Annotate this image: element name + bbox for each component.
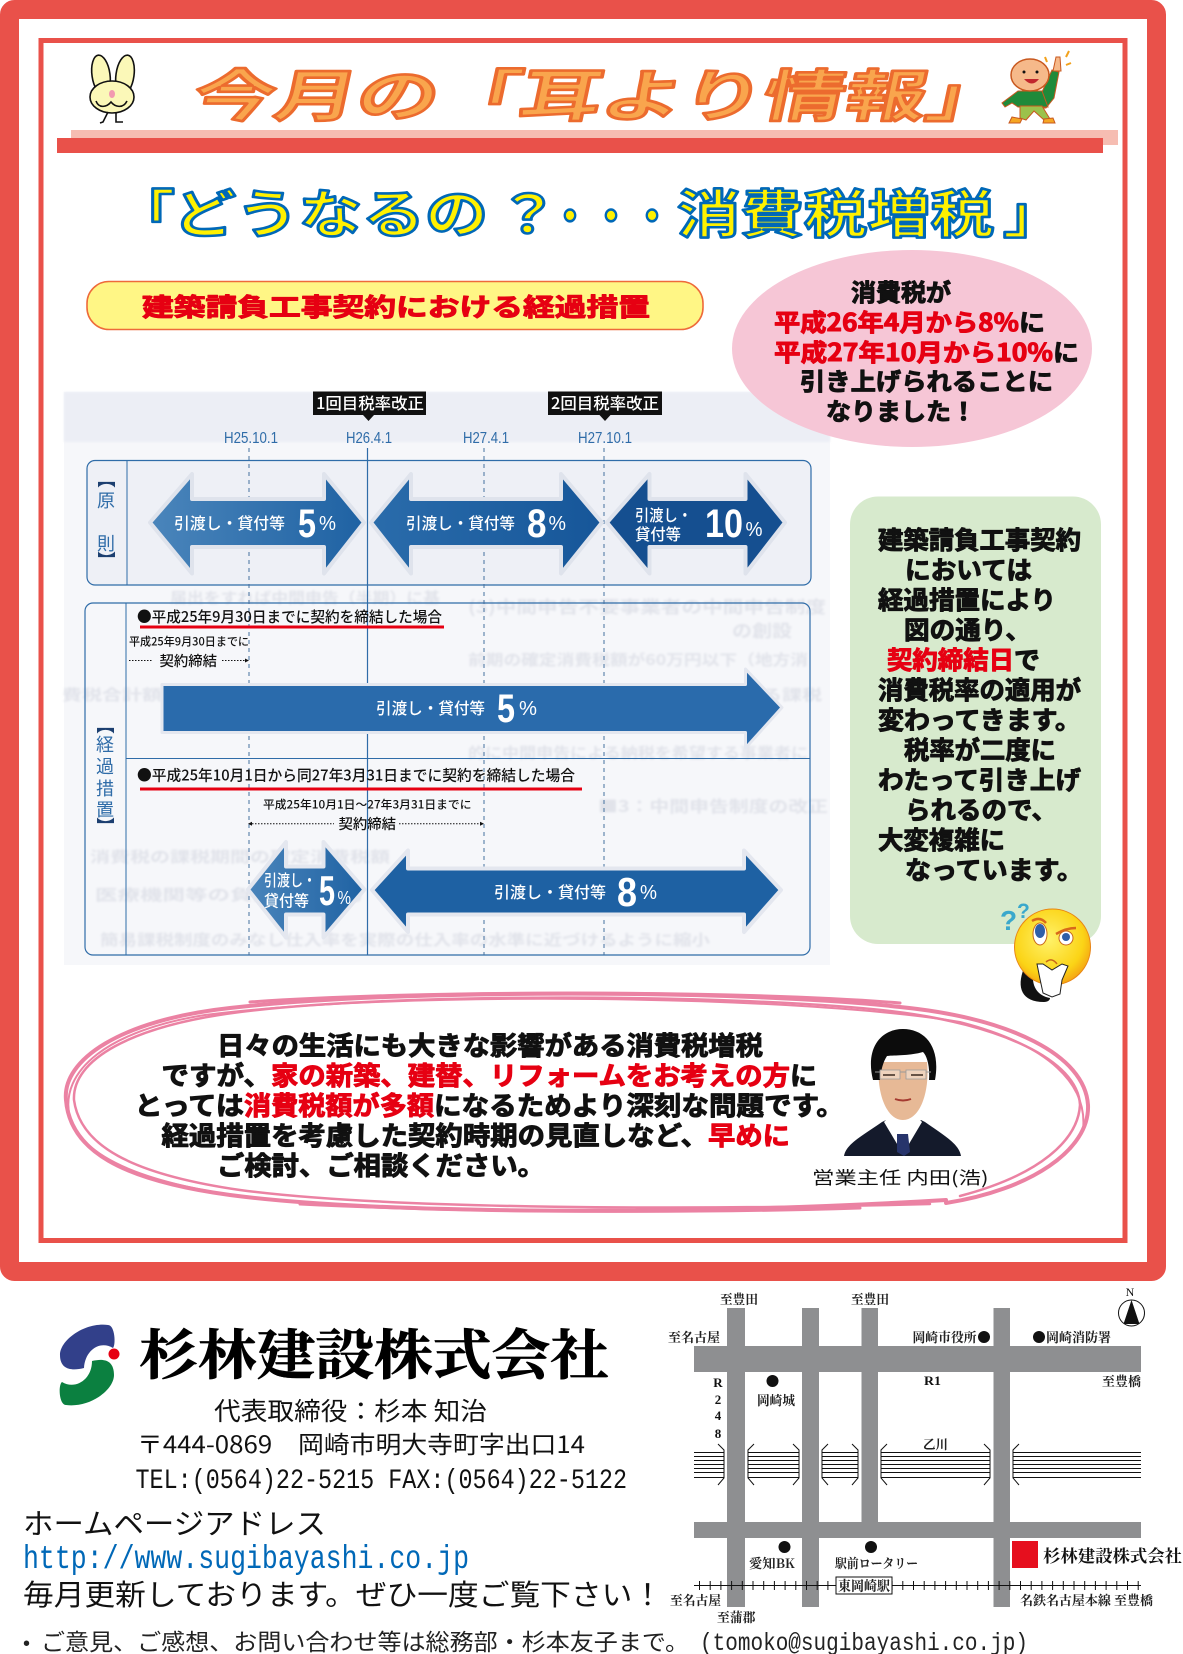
- map labels: 至豊田: [851, 1289, 889, 1308]
- red title rule: [57, 138, 1103, 153]
- message text: 消費税額が多額: [244, 1086, 434, 1123]
- map labels: 至豊橋: [1102, 1371, 1141, 1390]
- arrow: 10 percent principle: 貸付等: [635, 521, 681, 545]
- message text: 経過措置を考慮した契約時期の見直しなど、: [162, 1116, 708, 1153]
- label: transitional: 過: [96, 757, 114, 777]
- arrow: 5 percent transitional short: %: [338, 888, 351, 908]
- message text: 早めに: [708, 1116, 790, 1153]
- timeline dates: [224, 430, 632, 447]
- panel: green explanation: 消費税率の適用が: [878, 671, 1081, 707]
- subtitle: [113, 173, 1065, 248]
- arrow: 8 percent transitional: 引渡し・貸付等: [494, 879, 606, 903]
- portrait: sales manager: [844, 1029, 961, 1156]
- timeline dates: H25.10.1: [224, 430, 278, 447]
- chart scan background: ■3：中間申告制度の改正: [598, 793, 828, 817]
- message text: ご検討、ご相談ください。: [217, 1146, 545, 1183]
- case 2 contract note: [248, 796, 484, 834]
- panel: green explanation: 経過措置により: [878, 581, 1056, 617]
- icon: pointing man: [1002, 51, 1071, 123]
- panel: green explanation: 図の通り、: [904, 611, 1031, 647]
- chart scan background: 届出をすれば中間申告（半期）に基: [170, 587, 440, 608]
- map labels: 8: [715, 1426, 722, 1441]
- chart scan background: 消費税の課税期間の確定消費税額: [90, 846, 390, 867]
- label: transitional: 【: [94, 716, 114, 734]
- map labels: 乙川: [923, 1434, 948, 1453]
- arrow: 8 percent principle: 引渡し・貸付等: [406, 510, 515, 534]
- subtitle: 「: [113, 173, 175, 248]
- callout: pink tax summary: 平成26年4月から8%: [774, 303, 1019, 338]
- roads: [694, 1308, 1141, 1607]
- box: principle row: [87, 460, 811, 585]
- subtitle: ？: [497, 173, 559, 248]
- outer red frame: [10, 10, 1156, 1272]
- portrait caption: 営業主任 内田(浩): [812, 1165, 988, 1190]
- homepage url: http://www.sugibayashi.co.jp: [23, 1541, 469, 1578]
- arrow: 5 percent principle: [150, 474, 364, 574]
- chart scan background: [62, 392, 830, 965]
- arrow: 8 percent transitional: %: [640, 882, 657, 904]
- label: principle: 則: [97, 534, 115, 554]
- arrow: 5 percent transitional short: 5: [319, 867, 335, 914]
- timeline dates: H27.4.1: [463, 430, 509, 447]
- yellow heading pill: [87, 282, 703, 330]
- callout: pink tax summary: なりました！: [826, 392, 976, 427]
- arrow: 10 percent principle: 10: [705, 502, 743, 546]
- header: [57, 51, 1118, 153]
- label: principle: [96, 470, 116, 569]
- yellow heading pill: 建築請負工事契約における経過措置: [142, 288, 650, 324]
- arrow: 5 percent transitional long: [162, 669, 782, 748]
- chart scan background: 費税合計額が課税事業者は中間申告を行う事業者に対し中間申告期間を開始する課税: [62, 684, 822, 705]
- icon: north arrow: N: [1126, 1285, 1135, 1299]
- company marker: 杉林建設株式会社: [1043, 1542, 1182, 1567]
- callout: pink tax summary: 消費税が: [851, 273, 951, 308]
- message text: に: [790, 1056, 817, 1093]
- label: transitional: 措: [96, 779, 114, 799]
- callout: pink tax summary: に: [1019, 303, 1045, 338]
- case 1 contract note: 平成25年9月30日までに: [129, 634, 249, 650]
- case 2 contract note: 平成25年10月1日～27年3月31日までに: [263, 796, 472, 812]
- railway: 東岡崎駅: [838, 1576, 890, 1596]
- arrow: 10 percent principle: [607, 474, 785, 574]
- arrow: 5 percent transitional long: %: [519, 698, 537, 720]
- label: transitional: 置: [96, 800, 114, 820]
- label: principle: 【: [96, 470, 116, 488]
- map labels: 岡崎城: [757, 1390, 795, 1409]
- map labels: 岡崎市役所: [912, 1327, 976, 1346]
- arrow: 5 percent transitional short: 引渡し・: [264, 867, 316, 891]
- arrow: 8 percent transitional: 8: [617, 869, 637, 915]
- arrow: 10 percent principle: 引渡し・: [635, 502, 692, 526]
- case 2 heading: ●平成25年10月1日から同27年3月31日までに契約を締結した場合: [137, 764, 575, 786]
- message text: [134, 1026, 844, 1183]
- panel: green explanation: わたって引き上げ: [878, 761, 1081, 797]
- map labels: 至名古屋: [670, 1590, 721, 1609]
- label: transitional: [94, 716, 114, 835]
- icon: thinking face: ?: [1000, 905, 1017, 936]
- map: [668, 1285, 1182, 1626]
- tab: first tax revision: 1回目税率改正: [316, 390, 424, 414]
- arrow: 5 percent principle: %: [319, 513, 336, 535]
- panel: green explanation: 大変複雑に: [878, 821, 1005, 857]
- map labels: 4: [715, 1408, 722, 1423]
- label: principle: 】: [96, 551, 116, 569]
- homepage heading: ホームページアドレス: [23, 1501, 326, 1543]
- chart scan background: 的に中間申告による納税を希望する事業者に: [468, 742, 808, 763]
- map labels: [668, 1289, 1153, 1626]
- scribble ellipse: [66, 993, 1088, 1211]
- tab: second tax revision: 2回目税率改正: [551, 390, 659, 414]
- representative: 代表取締役：杉本 知治: [214, 1392, 487, 1428]
- arrow: 5 percent transitional short: [248, 842, 364, 938]
- callout: pink scribble message: [66, 993, 1088, 1211]
- callout: pink tax summary: に: [1053, 333, 1079, 368]
- map labels: 至豊田: [720, 1289, 758, 1308]
- message text: とっては: [134, 1086, 244, 1123]
- message text: ですが、: [162, 1056, 271, 1093]
- subtitle: 」: [1003, 173, 1065, 248]
- contact note: [23, 1623, 1028, 1654]
- case 2 contract note: 契約締結: [338, 814, 396, 834]
- case 1 heading: ●平成25年9月30日までに契約を締結した場合: [137, 606, 442, 627]
- pink title rule: [71, 130, 1118, 145]
- subtitle: 消費税増税: [677, 173, 994, 248]
- subtitle: どうなるの: [173, 173, 488, 248]
- case 1 contract note: [129, 634, 249, 671]
- map labels: R1: [924, 1373, 941, 1388]
- icon: company logo: [60, 1325, 120, 1405]
- panel: green explanation: で: [1014, 641, 1040, 677]
- chart scan background: (3)中間申告不要事業者の中間申告制度: [468, 593, 826, 618]
- label: principle: 原: [97, 491, 115, 511]
- panel: green explanation: られるので、: [905, 791, 1057, 827]
- arrow: 5 percent principle: 5: [298, 502, 316, 546]
- chart scan background: 前期の確定消費税額が60万円以下（地方消: [468, 649, 808, 670]
- icon: thinking face: [1000, 900, 1090, 1002]
- icon: rabbit mascot: [89, 54, 137, 123]
- river: [694, 1444, 1141, 1485]
- phone and fax: TEL:(0564)22-5215 FAX:(0564)22-5122: [136, 1466, 627, 1497]
- panel: green explanation: [850, 496, 1101, 944]
- arrow: 8 percent principle: [371, 474, 602, 574]
- callout: pink tax summary: [732, 250, 1092, 447]
- company name: 杉林建設株式会社: [139, 1313, 609, 1390]
- inner red frame: [41, 40, 1125, 1240]
- timeline dates: H26.4.1: [346, 430, 392, 447]
- message text: になるためより深刻な問題です。: [434, 1086, 844, 1123]
- map labels: 岡崎消防署: [1046, 1327, 1111, 1346]
- chart scan background: 簡易課税制度のみなし仕入率を実際の仕入率の水準に近づけるように縮小: [100, 929, 710, 950]
- arrow: 5 percent transitional long: 引渡し・貸付等: [376, 695, 485, 719]
- railway: [694, 1576, 1141, 1596]
- map labels: R: [713, 1375, 723, 1390]
- panel: green explanation: 契約締結日: [887, 641, 1014, 677]
- company block: [23, 1313, 1028, 1654]
- icon: north arrow: [1118, 1285, 1144, 1326]
- map labels: 2: [715, 1392, 721, 1407]
- label: transitional: 経: [96, 735, 114, 755]
- monthly update note: 毎月更新しております。ぜひ一度ご覧下さい！: [23, 1572, 663, 1614]
- chart scan background: の創設: [732, 617, 792, 642]
- panel: green explanation: なっています。: [905, 851, 1083, 887]
- arrow: 8 percent principle: 8: [527, 502, 546, 546]
- case 1 contract note: 契約締結: [160, 651, 217, 671]
- message text: 日々の生活にも大きな影響がある消費税増税: [217, 1026, 763, 1063]
- icon: thinking face: ?: [1017, 900, 1030, 923]
- panel: green explanation: 建築請負工事契約: [878, 521, 1081, 557]
- arrow: 5 percent principle: 引渡し・貸付等: [174, 510, 285, 534]
- title: 今月の「耳より情報」: [186, 52, 1019, 133]
- label: transitional: 】: [94, 817, 114, 835]
- arrow: 5 percent transitional long: 5: [497, 687, 515, 731]
- panel: green explanation: においては: [905, 551, 1032, 587]
- postal address: 〒444-0869 岡崎市明大寺町字出口14: [137, 1425, 585, 1460]
- chart: transitional measures timeline: [62, 390, 830, 965]
- map labels: 愛知BK: [749, 1553, 795, 1572]
- arrow: 10 percent principle: %: [746, 519, 763, 541]
- arrow: 8 percent transitional: [372, 850, 781, 932]
- map labels: 名鉄名古屋本線 至豊橋: [1020, 1590, 1153, 1609]
- callout: pink tax summary: 引き上げられることに: [800, 362, 1053, 397]
- panel: green explanation: 税率が二度に: [904, 731, 1056, 767]
- message text: 家の新築、建替、リフォームをお考えの方: [271, 1056, 790, 1093]
- map labels: 至名古屋: [668, 1327, 720, 1346]
- map labels: 駅前ロータリー: [834, 1553, 918, 1572]
- chart scan background: 医療機関等の負担の在り方: [95, 884, 365, 905]
- subtitle: ・・・: [550, 181, 672, 247]
- map labels: 至蒲郡: [717, 1607, 756, 1626]
- callout: pink tax summary: 平成27年10月から10%: [774, 333, 1053, 368]
- arrow: 5 percent transitional short: 貸付等: [264, 888, 309, 912]
- box: transitional row: [85, 603, 810, 955]
- timeline dates: H27.10.1: [578, 430, 632, 447]
- arrow: 8 percent principle: %: [548, 513, 566, 535]
- panel: green explanation: 変わってきます。: [878, 701, 1081, 737]
